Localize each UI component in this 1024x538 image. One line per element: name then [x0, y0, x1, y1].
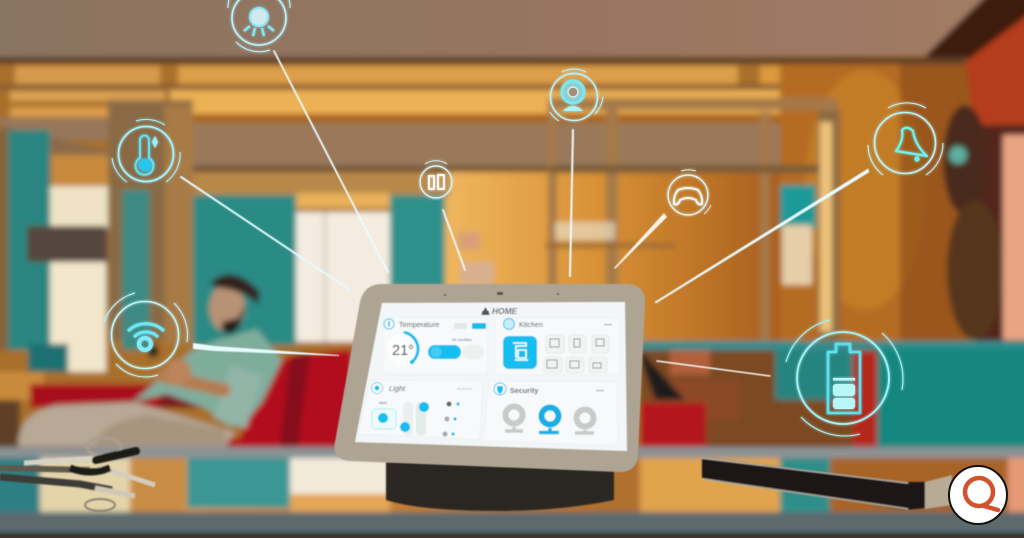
line: bell: [655, 169, 869, 303]
line: gamepad: [614, 213, 667, 269]
heading: HOME: [481, 306, 518, 316]
line: wifi: [193, 343, 339, 356]
panel: kitchen: [495, 318, 620, 375]
panel: temperature: 21°: [392, 343, 414, 359]
teal side table: [28, 344, 68, 372]
back wall: [445, 172, 790, 342]
heading: HOME: HOME: [492, 306, 518, 316]
left window: [50, 186, 108, 230]
ceiling corner shadow: [925, 0, 1024, 62]
icon: battery: [786, 320, 903, 436]
line: thermometer: [181, 177, 350, 290]
right red wall and dark plant: [965, 10, 1024, 135]
shelving: [548, 98, 840, 350]
panel: temperature: Temperature: [399, 320, 439, 329]
line: bulb: [274, 51, 388, 272]
logo letter Q: [965, 478, 998, 510]
icon: camera: [550, 69, 603, 121]
screen: [355, 302, 627, 451]
logo badge: [949, 466, 1007, 524]
center window: [296, 212, 390, 342]
line: battery: [657, 361, 770, 376]
keys: [0, 438, 155, 511]
man trousers: [18, 402, 235, 447]
left teal curtain: [0, 130, 50, 350]
coffee tile: [503, 336, 537, 369]
display bezel: [334, 284, 645, 472]
kitchen tiles: [544, 335, 609, 373]
lower room: [640, 350, 880, 450]
line: camera: [570, 130, 573, 276]
hub speaker base: [386, 462, 614, 511]
panel: kitchen: Kitchen: [519, 320, 543, 329]
panel: security: Security: [510, 386, 538, 395]
recessed taupe soffit: [190, 123, 780, 168]
table front edge: [0, 512, 1024, 533]
key ring: [87, 438, 121, 456]
icon: bell: [868, 103, 943, 175]
panel: light: [358, 380, 483, 440]
camera right: [575, 410, 594, 433]
hand phone: [146, 344, 160, 358]
camera center: [539, 408, 559, 432]
sofa: [30, 384, 160, 408]
right teal curtain: [390, 195, 445, 287]
panel: light: Maxi: [379, 401, 387, 405]
right orange wall: [780, 64, 965, 345]
table top edge: [0, 447, 1024, 458]
left post area: [108, 100, 193, 340]
line: toggle: [443, 210, 465, 270]
decor on wall: [458, 232, 480, 250]
table reflection: [0, 455, 1024, 515]
camera left: [505, 406, 523, 431]
panel: light: Bedroom: [457, 387, 472, 391]
key one: [24, 458, 100, 463]
panel: security: [483, 381, 618, 446]
icon: toggle switch: [420, 161, 452, 198]
beams: [0, 57, 970, 122]
panel: temperature: Air condition: [452, 338, 472, 342]
key two: [96, 468, 155, 485]
icon: thermometer: [112, 119, 180, 182]
panel: temperature: [383, 318, 488, 374]
man shirt: [133, 329, 282, 426]
phone: [702, 457, 952, 510]
ceiling: [0, 0, 1024, 60]
key shadow: [0, 477, 112, 490]
lamp shade: [27, 226, 107, 262]
icon: bulb: [228, 0, 290, 52]
man arm: [162, 376, 224, 390]
icon: wifi: [104, 293, 188, 377]
icon: gamepad: [668, 170, 711, 215]
connector lines: [181, 51, 869, 376]
camera dots: [444, 294, 446, 296]
teal rail and panel: [640, 341, 1024, 350]
man head: [209, 284, 245, 332]
panel: light: Light: [389, 384, 406, 393]
center teal curtain: [193, 195, 296, 345]
smart display: [334, 284, 645, 472]
